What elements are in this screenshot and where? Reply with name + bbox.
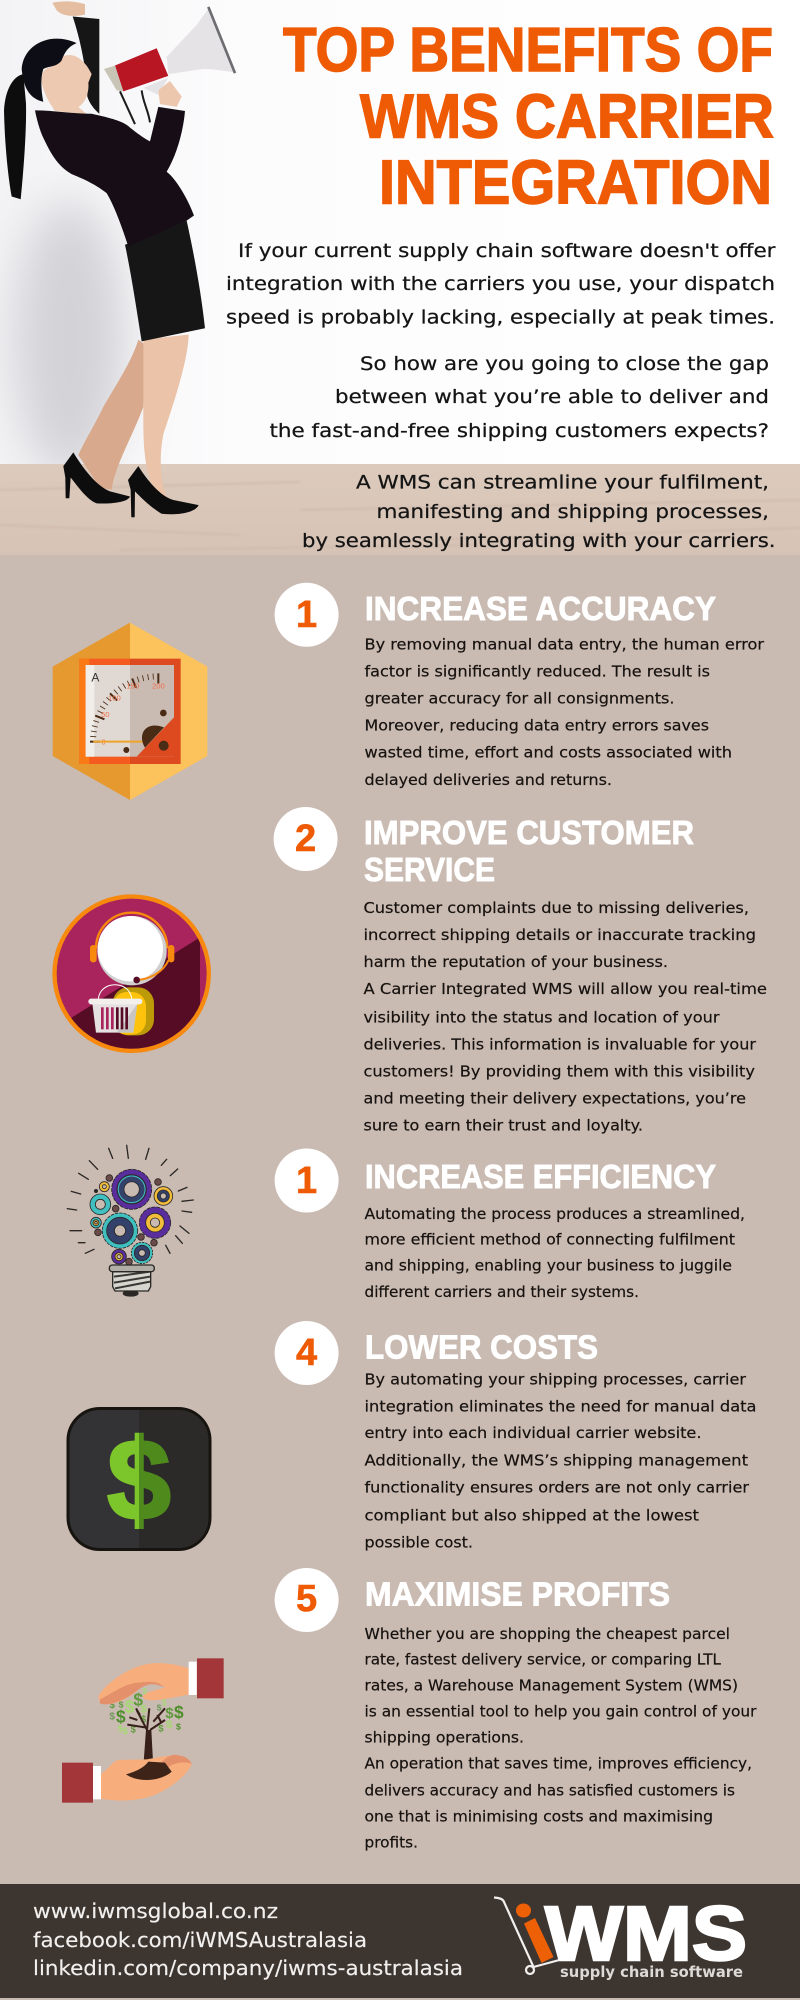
icon: hands protecting money tree: $: [116, 1707, 126, 1727]
heading: maximise profits: MAXIMISE PROFITS: [365, 1576, 670, 1614]
body text: increase accuracy: wasted time, effort and costs associated with: [364, 744, 732, 762]
body text: lower costs: compliant but also shipped at the lowest: [364, 1507, 699, 1525]
wall and floor photo background: [0, 0, 800, 555]
icon: ammeter gauge: 0: [101, 737, 106, 746]
body text: lower costs: [364, 1371, 756, 1551]
body text: maximise profits: rate, fastest delivery service, or comparing LTL: [364, 1650, 722, 1668]
intro paragraph: what a WMS can do: by seamlessly integrating with your carriers.: [302, 530, 776, 552]
body text: lower costs: possible cost.: [364, 1533, 473, 1551]
body text: improve customer service: harm the reputation of your business.: [364, 953, 668, 971]
icon: hands protecting money tree: [62, 1658, 224, 1803]
icon: hands protecting money tree: $: [123, 1688, 130, 1700]
icon: hands protecting money tree: $: [141, 1715, 147, 1726]
panel: benefit 3 increase efficiency: [67, 1145, 745, 1301]
footer contact links: facebook.com/iWMSAustralasia: [33, 1928, 367, 1952]
icon: ammeter gauge: 100: [108, 694, 121, 703]
intro paragraph: closing the gap: So how are you going to close the gap: [360, 353, 769, 375]
intro paragraph: supply chain software: [226, 240, 776, 328]
intro paragraph: supply chain software: If your current supply chain software doesn't offer: [238, 240, 776, 262]
body text: maximise profits: profits.: [364, 1834, 418, 1852]
logo: iWMS supply chain software: supply chain software: [560, 1963, 743, 1981]
number badge 5: 5: [296, 1578, 317, 1620]
icon: hands protecting money tree: $: [174, 1702, 184, 1722]
body text: improve customer service: and meeting their delivery expectations, you’re: [364, 1090, 746, 1108]
number badge 4: [275, 1321, 339, 1385]
icon: hands protecting money tree: $: [166, 1719, 173, 1731]
footer contact links: www.iwmsglobal.co.nz: [33, 1899, 278, 1923]
heading: increase accuracy: INCREASE ACCURACY: [365, 591, 716, 628]
logo: iWMS supply chain software: WMS: [545, 1891, 747, 1977]
body text: improve customer service: customers! By providing them with this visibility: [364, 1062, 755, 1080]
heading: improve customer service: [364, 815, 694, 889]
icon: hands protecting money tree: $: [162, 1699, 167, 1708]
body text: increase efficiency: different carriers and their systems.: [364, 1283, 639, 1301]
body text: maximise profits: delivers accuracy and has satisfied customers is: [364, 1781, 735, 1799]
body text: maximise profits: Whether you are shopping the cheapest parcel: [364, 1625, 730, 1643]
body text: lower costs: By automating your shipping processes, carrier: [364, 1371, 747, 1389]
icon: hands protecting money tree: $: [157, 1703, 162, 1713]
title: INTEGRATION: [379, 148, 772, 218]
heading: improve customer service: IMPROVE CUSTOMER: [364, 815, 694, 852]
body text: improve customer service: deliveries. This information is invaluable for your: [364, 1036, 757, 1054]
number badge 2: [274, 807, 338, 871]
number badge 1: [275, 583, 339, 647]
icon: ammeter gauge: A: [91, 670, 99, 684]
icon: ammeter gauge: 50: [101, 710, 110, 719]
panel: benefit 4 lower costs: [68, 1321, 756, 1551]
icon: hands protecting money tree: $: [123, 1726, 129, 1736]
intro paragraph: closing the gap: [270, 353, 769, 442]
icon: hands protecting money tree: $: [109, 1711, 115, 1722]
icon: hands protecting money tree: $: [131, 1725, 137, 1735]
body text: improve customer service: Customer complaints due to missing deliveries,: [364, 899, 749, 917]
body text: maximise profits: [364, 1625, 757, 1852]
body text: maximise profits: An operation that saves time, improves efficiency,: [364, 1755, 752, 1773]
icon: hands protecting money tree: $: [118, 1724, 124, 1734]
number badge 4: 4: [296, 1332, 317, 1374]
title: [283, 16, 774, 218]
footer contact links: [33, 1899, 463, 1980]
heading: increase efficiency: INCREASE EFFICIENCY: [365, 1159, 716, 1196]
heading: lower costs: LOWER COSTS: [365, 1330, 598, 1366]
icon: hands protecting money tree: $: [133, 1689, 143, 1709]
body text: maximise profits: shipping operations.: [364, 1729, 524, 1747]
body text: improve customer service: incorrect shipping details or inaccurate tracking: [364, 926, 756, 944]
body text: maximise profits: is an essential tool to help you gain control of your: [364, 1703, 757, 1721]
footer contact links: linkedin.com/company/iwms-australasia: [33, 1956, 463, 1980]
intro paragraph: supply chain software: integration with the carriers you use, your dispatch: [226, 273, 775, 295]
body text: maximise profits: one that is minimising costs and maximising: [364, 1807, 713, 1825]
icon: hands protecting money tree: $: [165, 1706, 173, 1722]
body text: maximise profits: rates, a Warehouse Management System (WMS): [364, 1676, 738, 1694]
icon: hands protecting money tree: $: [125, 1697, 135, 1717]
number badge 2: 2: [295, 818, 316, 860]
body text: increase accuracy: [364, 636, 765, 789]
icon: hands protecting money tree: $: [119, 1699, 124, 1709]
icon: hands protecting money tree: $: [158, 1724, 164, 1734]
icon: dollar app tile: [68, 1408, 210, 1550]
body text: increase efficiency: and shipping, enabling your business to juggile: [364, 1256, 732, 1274]
body text: lower costs: integration eliminates the need for manual data: [364, 1397, 756, 1415]
body text: increase accuracy: Moreover, reducing data entry errors saves: [364, 716, 709, 734]
body text: lower costs: Additionally, the WMS’s shipping management: [364, 1452, 748, 1470]
body text: increase accuracy: delayed deliveries and returns.: [364, 771, 612, 789]
icon: hands protecting money tree: $: [143, 1687, 148, 1696]
icon: ammeter gauge: 200: [152, 682, 165, 691]
title: WMS CARRIER: [360, 82, 774, 152]
panel: benefit 5 maximise profits: [62, 1568, 757, 1852]
body text: increase efficiency: [364, 1205, 745, 1301]
icon: hands protecting money tree: $: [176, 1721, 181, 1731]
heading: improve customer service: SERVICE: [364, 852, 495, 889]
icon: dollar app tile: $: [107, 1417, 171, 1544]
intro paragraph: closing the gap: between what you’re able to deliver and: [335, 386, 769, 408]
woman with megaphone photo: [4, 1, 235, 517]
number badge 5: [275, 1568, 339, 1632]
icon: hands protecting money tree: $: [109, 1700, 115, 1711]
body text: increase efficiency: more efficient method of connecting fulfilment: [364, 1230, 735, 1248]
panel: benefit 1 increase accuracy: [53, 583, 765, 800]
icon: customer service agent: [52, 894, 211, 1053]
body text: lower costs: entry into each individual carrier website.: [364, 1424, 702, 1442]
body text: improve customer service: A Carrier Integrated WMS will allow you real-time: [364, 980, 767, 998]
body text: increase efficiency: Automating the process produces a streamlined,: [364, 1205, 745, 1223]
body text: improve customer service: sure to earn their trust and loyalty.: [364, 1116, 643, 1134]
icon: gear light bulb: [67, 1145, 193, 1297]
icon: hands protecting money tree: $: [141, 1704, 148, 1716]
number badge 3: 1: [296, 1160, 317, 1202]
body text: increase accuracy: factor is significantly reduced. The result is: [364, 662, 710, 680]
body text: lower costs: functionality ensures orders are not only carrier: [364, 1478, 750, 1496]
intro paragraph: supply chain software: speed is probably lacking, especially at peak times.: [226, 306, 775, 328]
body text: increase accuracy: By removing manual data entry, the human error: [364, 636, 765, 654]
intro paragraph: closing the gap: the fast-and-free shipping customers expects?: [270, 420, 769, 442]
body text: improve customer service: [364, 899, 767, 1134]
number badge 1: 1: [296, 594, 317, 636]
panel: footer: [0, 1884, 800, 1998]
icon: ammeter gauge: [53, 623, 207, 800]
panel: hero: [0, 0, 800, 555]
number badge 3: [275, 1148, 339, 1212]
intro paragraph: what a WMS can do: A WMS can streamline your fulfilment,: [356, 472, 769, 494]
icon: ammeter gauge: 150: [126, 682, 139, 691]
body text: improve customer service: visibility into the status and location of your: [364, 1008, 720, 1026]
body text: increase accuracy: greater accuracy for all consignments.: [364, 690, 674, 708]
panel: benefit 2 improve customer service: [52, 807, 767, 1134]
intro paragraph: what a WMS can do: manifesting and shipping processes,: [376, 501, 769, 523]
intro paragraph: what a WMS can do: [302, 472, 776, 552]
